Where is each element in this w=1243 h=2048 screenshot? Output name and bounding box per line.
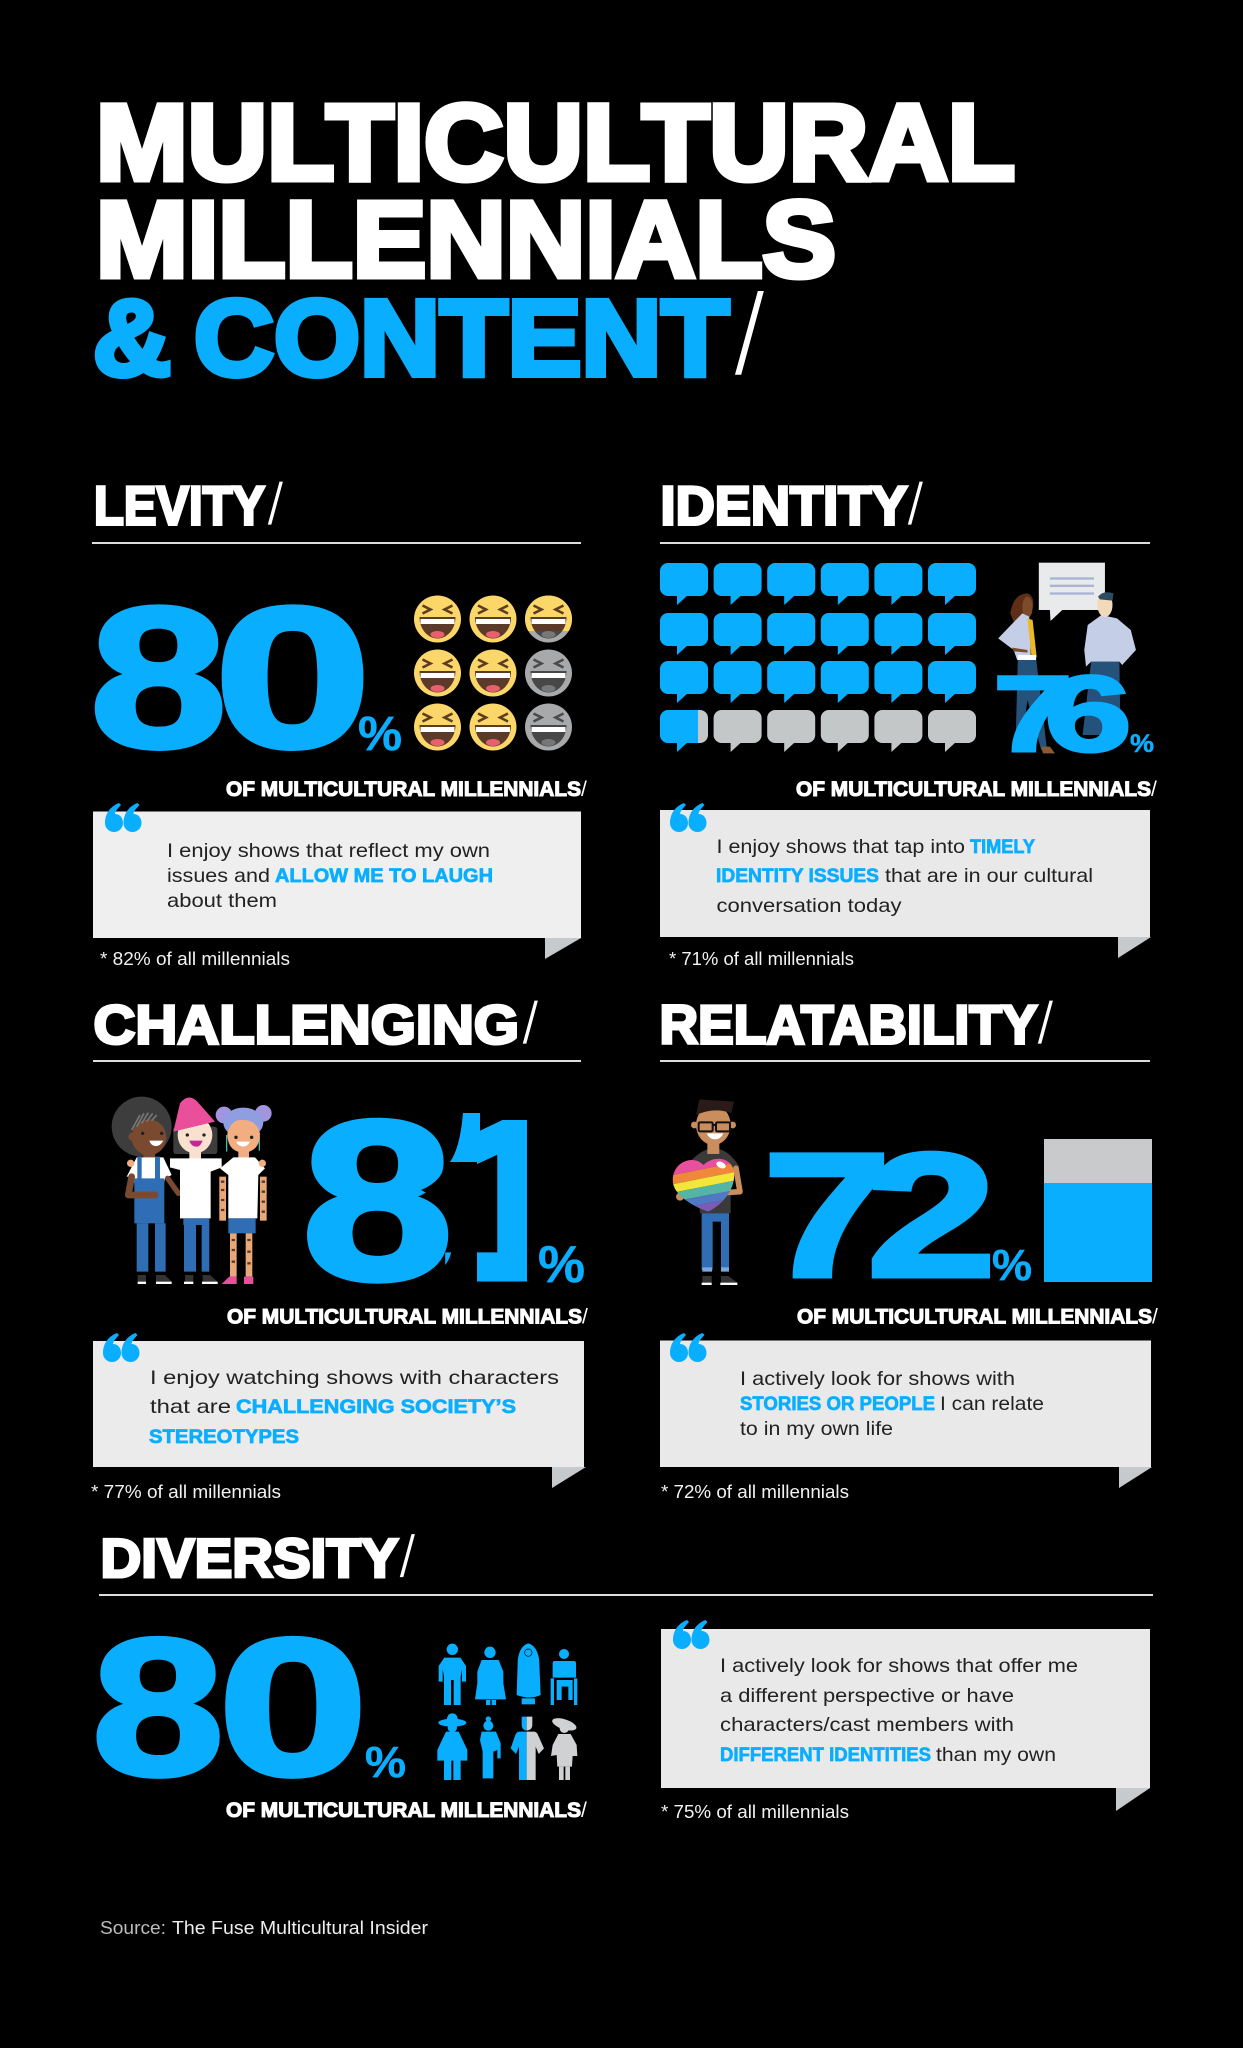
label: of multicultural millennials: OF MULTICULTURAL MILLENNIALS [796, 778, 1151, 801]
heading: levity: / [267, 470, 284, 538]
label: of multicultural millennials: / [581, 778, 587, 801]
quote text: STEREOTYPES [149, 1426, 299, 1448]
quote text [740, 1368, 1044, 1440]
illustration: three friends [112, 1097, 272, 1284]
icon grid: diverse people [437, 1643, 578, 1780]
panel: identity [660, 470, 1157, 969]
quote text: IDENTITY ISSUES [716, 865, 879, 887]
illustration: two people talking [998, 563, 1136, 753]
statistic: 76 percent: 6 [1044, 653, 1132, 774]
panel: challenging [91, 990, 602, 1502]
quote text: issues and [167, 865, 270, 887]
label: of multicultural millennials: OF MULTICULTURAL MILLENNIALS [226, 1799, 581, 1822]
icon grid: laughing emoji [414, 596, 572, 750]
label: of multicultural millennials: OF MULTICULTURAL MILLENNIALS [227, 1306, 582, 1328]
quote text: that are [150, 1396, 231, 1418]
label: of multicultural millennials: OF MULTICULTURAL MILLENNIALS [226, 778, 581, 801]
quote text: conversation today [716, 895, 902, 917]
heading: diversity: DIVERSITY [100, 1527, 398, 1589]
quote box [93, 1333, 586, 1488]
heading: levity: LEVITY [94, 474, 265, 536]
quote text: I enjoy shows that reflect my own [167, 840, 490, 862]
quote text: I actively look for shows with [740, 1368, 1015, 1390]
quote text: I enjoy watching shows with characters [150, 1367, 559, 1389]
quote text: STORIES OR PEOPLE [740, 1393, 935, 1415]
quote text: TIMELY [970, 836, 1035, 858]
title: MULTICULTURAL [96, 82, 1015, 202]
source line: The Fuse Multicultural Insider [172, 1917, 428, 1938]
label: of multicultural millennials: / [1152, 1306, 1158, 1328]
icon: quotation mark [103, 1333, 140, 1362]
title: / [733, 269, 766, 401]
statistic: 81 percent: 8 [302, 1074, 453, 1326]
quote text: CHALLENGING SOCIETY’S [236, 1396, 516, 1418]
title: CONTENT [194, 277, 729, 398]
quote text: DIFFERENT IDENTITIES [720, 1744, 931, 1766]
quote text: that are in our cultural [885, 865, 1093, 887]
quote text: I enjoy shows that tap into [716, 836, 965, 858]
quote text: I can relate [940, 1393, 1044, 1415]
percent sign: % [538, 1236, 585, 1294]
statistic: 72 percent: 7 [763, 1118, 891, 1314]
percent sign: % [365, 1738, 406, 1787]
quote text [720, 1655, 1078, 1766]
quote box [93, 803, 581, 959]
footnote: * 72% of all millennials [661, 1482, 849, 1502]
quote text: ALLOW ME TO LAUGH [275, 865, 493, 887]
quote box [661, 1620, 1150, 1811]
footnote: * 71% of all millennials [669, 949, 854, 969]
icon: quotation mark [105, 803, 142, 832]
heading: challenging: / [522, 990, 539, 1056]
statistic: 80 percent: 8 [92, 1598, 224, 1816]
heading: challenging: CHALLENGING [94, 994, 519, 1056]
quote text [167, 840, 493, 912]
statistic: 72 percent: 2 [867, 1118, 996, 1314]
panel: levity [90, 470, 587, 969]
title [93, 82, 1015, 401]
label: of multicultural millennials: / [1151, 778, 1157, 801]
quote text [149, 1367, 559, 1448]
illustration: person holding rainbow heart [672, 1100, 743, 1285]
statistic: 80 percent: 0 [214, 566, 372, 790]
quote text: about them [167, 890, 277, 912]
percent sign: % [992, 1241, 1032, 1290]
quote text: I actively look for shows that offer me [720, 1655, 1078, 1677]
heading: identity: IDENTITY [660, 474, 908, 536]
percent sign: % [1130, 730, 1154, 758]
statistic: 80 percent: 0 [218, 1598, 368, 1816]
panel: relatability [654, 990, 1158, 1502]
icon grid: speech bubbles [660, 563, 976, 752]
heading: relatability: RELATABILITY [660, 994, 1038, 1056]
statistic: 76 percent: 7 [993, 653, 1073, 774]
infographic canvas [91, 101, 1158, 1934]
panel: diversity [92, 1523, 1153, 1822]
quote text: than my own [936, 1744, 1056, 1766]
footnote: * 75% of all millennials [661, 1802, 849, 1822]
label: of multicultural millennials: / [582, 1306, 588, 1328]
heading: diversity: / [399, 1523, 416, 1590]
quote box [660, 803, 1151, 958]
icon: quotation mark [670, 803, 706, 832]
label: of multicultural millennials: / [581, 1799, 587, 1822]
icon: quotation mark [670, 1333, 706, 1362]
quote text: characters/cast members with [720, 1714, 1014, 1736]
statistic: 80 percent: 8 [90, 566, 227, 790]
percent sign: % [358, 708, 402, 761]
source line: Source: [100, 1917, 166, 1938]
statistic: 81 percent: 1 [430, 1074, 600, 1326]
heading: identity: / [907, 470, 924, 538]
title: & [93, 277, 171, 398]
footnote: * 82% of all millennials [100, 949, 290, 969]
footnote: * 77% of all millennials [91, 1482, 281, 1502]
icon: quotation mark [673, 1620, 710, 1649]
label: of multicultural millennials: OF MULTICULTURAL MILLENNIALS [797, 1306, 1152, 1328]
quote text: to in my own life [740, 1418, 893, 1440]
quote text: a different perspective or have [720, 1685, 1014, 1707]
heading: relatability: / [1037, 990, 1054, 1056]
title: MILLENNIALS [96, 178, 836, 300]
quote text [716, 836, 1093, 917]
bar: 72 percent fill [1044, 1139, 1152, 1282]
quote box [660, 1333, 1152, 1488]
